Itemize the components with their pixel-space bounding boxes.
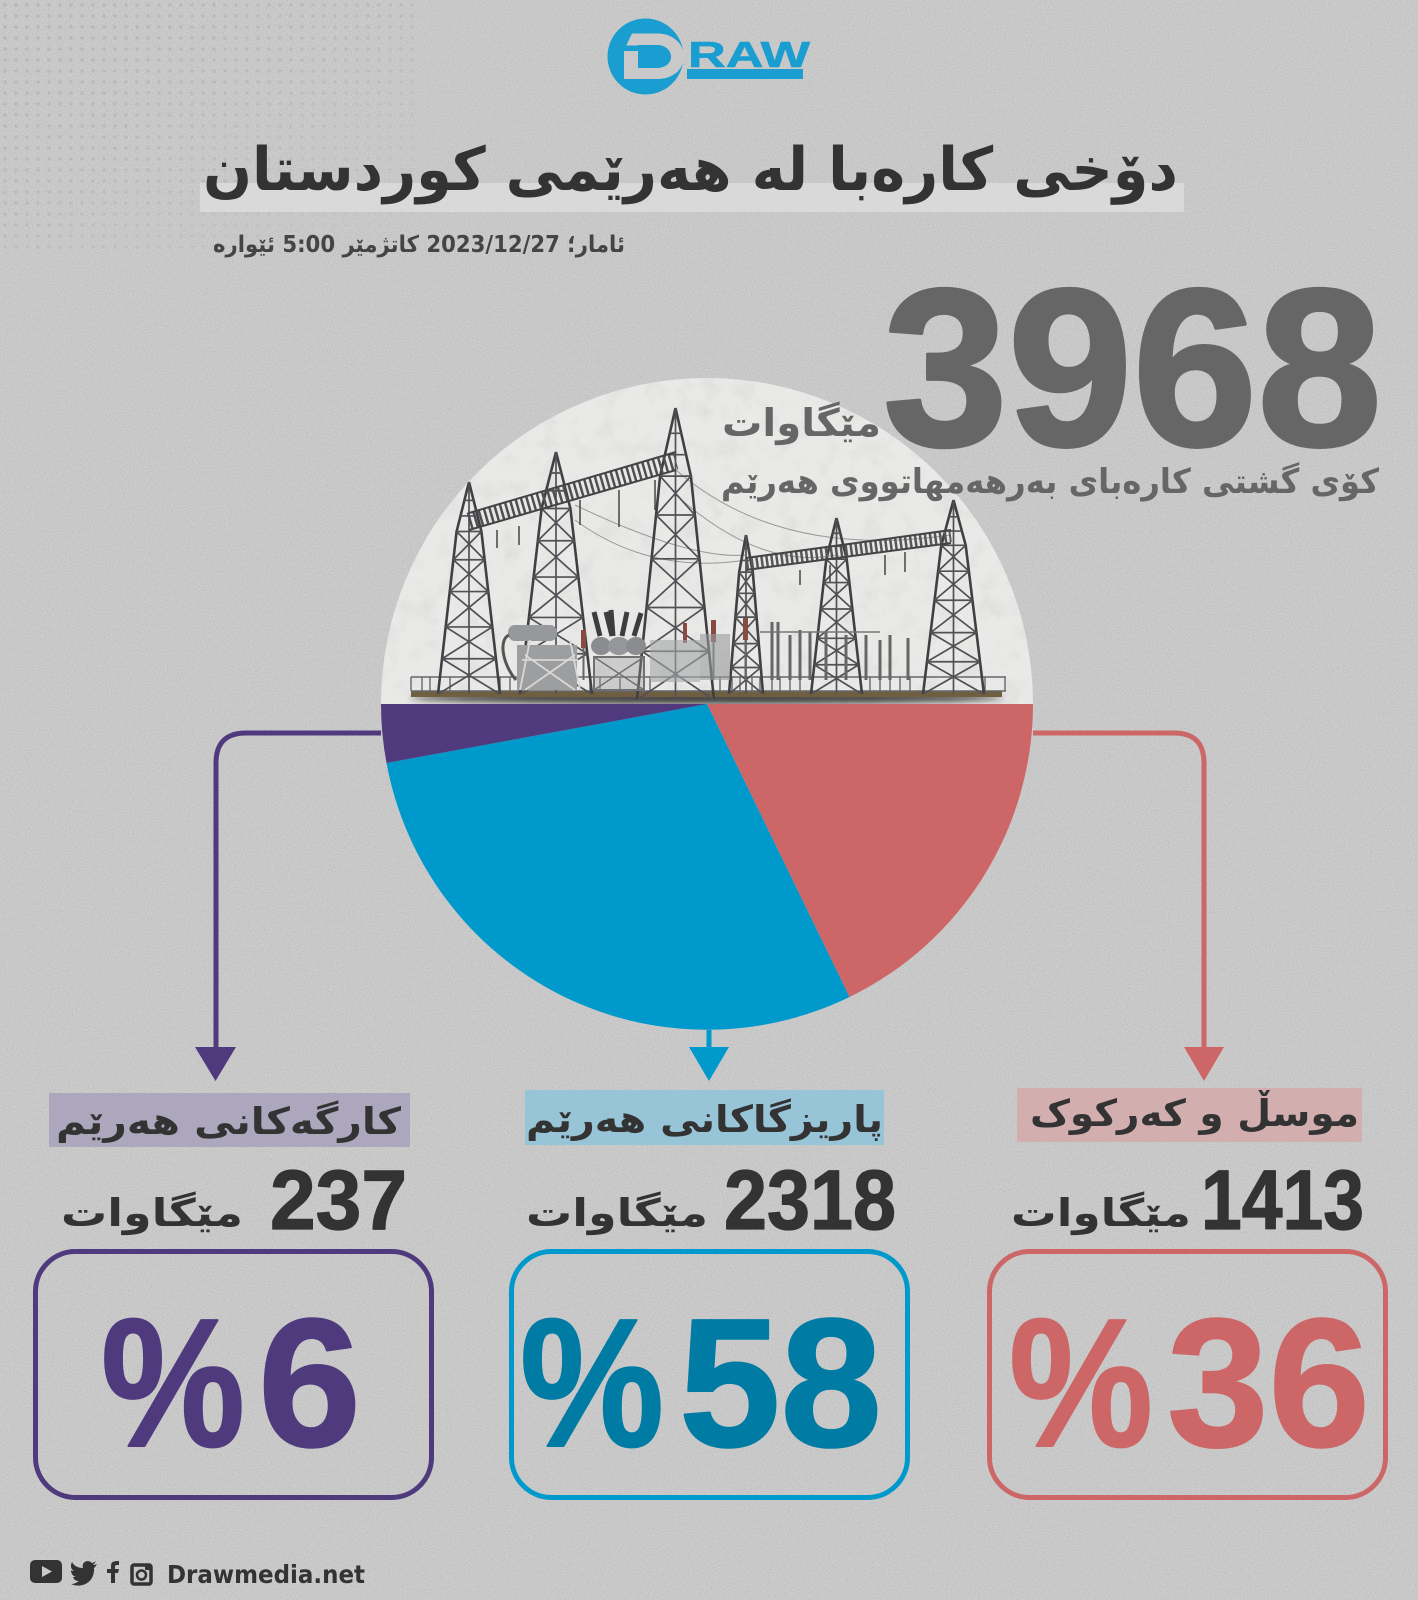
total caption: کۆی گشتی کارەبای بەرهەمهاتووی هەرێم	[721, 462, 1379, 502]
website: Drawmedia.net	[167, 1560, 365, 1589]
total number: 3968	[883, 243, 1382, 493]
percentage: %	[520, 1280, 664, 1485]
circuit breakers	[594, 610, 641, 636]
panel: factories	[36, 1093, 432, 1498]
label band	[525, 1090, 884, 1145]
percentage: %	[101, 1280, 245, 1485]
unit: مێگاوات	[526, 1191, 708, 1236]
title band	[200, 183, 1184, 212]
heading: موسڵ و کەرکوک	[1030, 1090, 1359, 1135]
arrow: Mosul and Kirkuk	[1033, 733, 1224, 1081]
label band	[1017, 1088, 1362, 1142]
insulators	[581, 630, 586, 648]
value: 1413	[1201, 1153, 1364, 1247]
unit: مێگاوات	[61, 1191, 243, 1236]
percentage: 36	[1167, 1280, 1370, 1485]
logo: Draw	[608, 18, 810, 94]
percentage	[520, 1280, 882, 1485]
arrow: factories	[195, 733, 381, 1081]
logo: Draw: RAW	[688, 34, 810, 75]
value: 237	[270, 1153, 407, 1247]
percentage: 58	[679, 1280, 882, 1485]
pie slice: Mosul and Kirkuk 36%	[707, 704, 1033, 997]
percentage box	[512, 1252, 908, 1498]
heading: پاریزگاکانی هەرێم	[526, 1098, 883, 1141]
percentage	[1009, 1280, 1370, 1485]
date line: ئامار؛ 2023/12/27 کاتژمێر 5:00 ئێوارە	[213, 232, 625, 258]
value: 2318	[724, 1153, 896, 1247]
title: دۆخی کارەبا لە هەرێمی کوردستان	[203, 135, 1178, 205]
arrow: provinces	[689, 1030, 729, 1081]
unit: مێگاوات	[1011, 1191, 1191, 1236]
percentage box	[36, 1252, 432, 1498]
illustration: electrical substation	[381, 378, 1033, 704]
icon: twitter	[71, 1561, 97, 1586]
pie slice: provinces 58%	[386, 704, 850, 1030]
photo background: half circle	[381, 378, 1033, 704]
pie chart with substation photo	[381, 378, 1033, 1030]
percentage box	[990, 1252, 1386, 1498]
transformer	[517, 645, 577, 690]
percentage	[101, 1280, 361, 1485]
pie slice: factories 6%	[381, 704, 707, 763]
heading: کارگەکانی هەرێم	[56, 1100, 402, 1143]
icon: instagram	[132, 1565, 151, 1584]
percentage: 6	[258, 1280, 361, 1485]
panel: Mosul and Kirkuk	[990, 1088, 1386, 1498]
icon: facebook	[107, 1561, 119, 1583]
total unit: مێگاوات	[722, 401, 881, 446]
percentage: %	[1009, 1280, 1153, 1485]
label band	[49, 1093, 410, 1147]
icon: youtube	[30, 1560, 62, 1583]
panel: provinces	[512, 1090, 908, 1498]
